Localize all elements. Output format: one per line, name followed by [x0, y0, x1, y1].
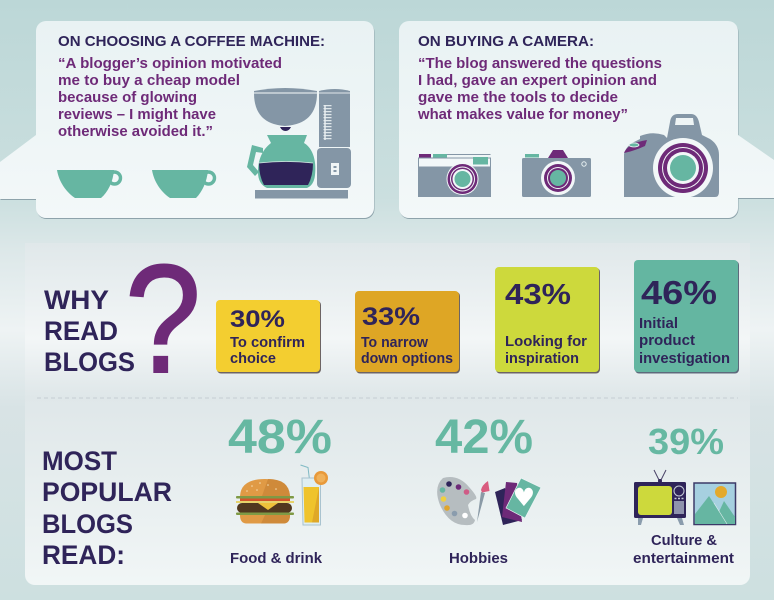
heading: coffee machine: ON CHOOSING A COFFEE MACHINE: [58, 33, 325, 50]
card: 43% looking for inspiration [495, 267, 600, 374]
quote: camera: gave me the tools to decide [418, 90, 618, 106]
card: 30% to confirm choice [216, 300, 321, 374]
stat: 48% food and drink: 48% [228, 411, 332, 464]
card: 30% to confirm choice: 30% [230, 306, 285, 333]
card: 43% looking for inspiration: 43% [505, 279, 571, 311]
panel: coffee machine quote bubble [0, 21, 374, 219]
label: culture and entertainment [633, 533, 734, 567]
quote: coffee machine [58, 56, 282, 140]
icon: juice glass [300, 465, 328, 525]
card: 46% initial product investigation: Initial [639, 316, 678, 332]
card: 46% initial product investigation: 46% [641, 274, 717, 311]
heading: most popular blogs read [42, 446, 172, 570]
quote: coffee machine: otherwise avoided it.” [58, 124, 213, 140]
heading: why read blogs: READ [44, 316, 118, 346]
card: 33% to narrow down options: 33% [362, 303, 420, 331]
card: 46% initial product investigation: investigation [639, 351, 730, 367]
card: 30% to confirm choice: To confirm [230, 335, 305, 351]
icon: playing cards [495, 478, 541, 525]
card: 46% initial product investigation: product [639, 333, 695, 349]
label: food and drink: Food & drink [230, 551, 323, 567]
heading: camera: ON BUYING A CAMERA: [418, 33, 594, 50]
heading: why read blogs [44, 285, 135, 377]
icon: question mark: ? [125, 233, 201, 405]
quote: camera [417, 56, 662, 123]
card: 46% initial product investigation [634, 260, 739, 374]
card: 33% to narrow down options: down options [361, 351, 453, 367]
quote: camera: what makes value for money” [417, 107, 628, 123]
heading: why read blogs: BLOGS [44, 347, 135, 377]
card: 30% to confirm choice: choice [230, 351, 276, 367]
quote: coffee machine: because of glowing [58, 90, 197, 106]
heading: most popular blogs read: MOST [42, 446, 117, 476]
icon: rangefinder camera [418, 154, 491, 197]
label: culture and entertainment: Culture & [651, 533, 718, 549]
quote: coffee machine: reviews – I might have [58, 107, 216, 123]
icon: burger [236, 479, 294, 524]
card: 33% to narrow down options [355, 291, 460, 374]
quote: camera: “The blog answered the questions [418, 56, 662, 72]
quote: camera: I had, gave an expert opinion and [418, 73, 657, 89]
icon: television [634, 470, 686, 525]
icon: cup two [152, 170, 214, 198]
icon: DSLR camera [624, 114, 719, 198]
card: 43% looking for inspiration: Looking for [505, 334, 587, 350]
card: 33% to narrow down options: To narrow [361, 335, 429, 351]
card: 43% looking for inspiration: inspiration [505, 351, 579, 367]
heading: most popular blogs read: BLOGS [42, 509, 133, 539]
icon: cup one [57, 170, 120, 198]
stat: 42% hobbies: 42% [435, 411, 533, 464]
heading: why read blogs: WHY [44, 285, 109, 315]
label: culture and entertainment: entertainment [633, 551, 734, 567]
heading: most popular blogs read: READ: [42, 540, 125, 570]
quote: coffee machine: “A blogger’s opinion motivated [58, 56, 282, 72]
icon: compact camera [522, 150, 591, 197]
stat: 39% culture and entertainment: 39% [648, 421, 724, 462]
label: hobbies: Hobbies [449, 551, 508, 567]
icon: paint palette [437, 477, 476, 525]
panel: survey results [25, 233, 750, 585]
icon: landscape picture [694, 483, 736, 524]
icon: paint brush [477, 481, 490, 522]
heading: most popular blogs read: POPULAR [42, 477, 172, 507]
panel: camera quote bubble [399, 21, 774, 219]
icon: coffee machine [247, 88, 351, 198]
quote: coffee machine: me to buy a cheap model [58, 73, 240, 89]
icon: playing cards: ♥ [513, 483, 535, 512]
